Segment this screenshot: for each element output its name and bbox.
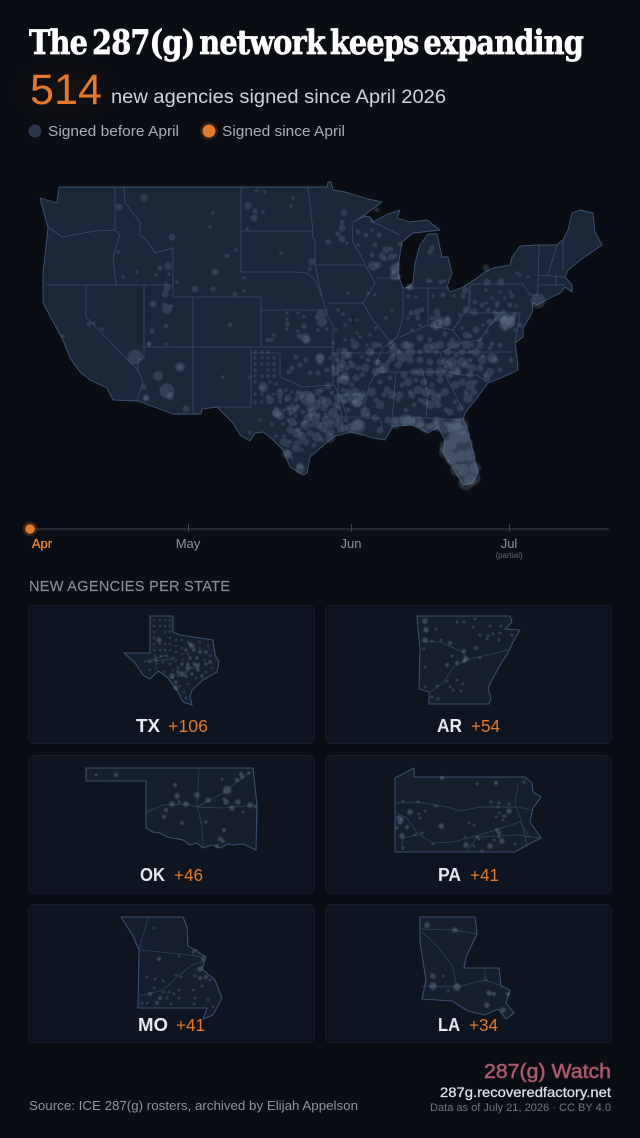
credits: 287g.recoveredfactory.net (440, 1084, 611, 1100)
label: +46 (174, 865, 203, 885)
label: +54 (471, 716, 500, 736)
timeline: Jun (341, 536, 361, 551)
panel: TX (28, 606, 314, 744)
panel: AR (326, 606, 612, 744)
headline stat: 514 (30, 66, 102, 114)
label (437, 716, 500, 736)
label: OK (140, 865, 165, 885)
label: AR (437, 716, 462, 736)
label: +106 (168, 716, 208, 736)
map: United States agencies (40, 182, 602, 485)
legend (28, 122, 345, 140)
label (438, 1015, 498, 1035)
timeline: May (176, 536, 201, 551)
panel: PA (326, 756, 612, 894)
label: MO (138, 1015, 168, 1035)
credits: 287(g) Watch (484, 1061, 611, 1083)
timeline: Apr (32, 536, 53, 551)
label (438, 865, 499, 885)
timeline (22, 522, 609, 560)
timeline: Jul (501, 536, 517, 551)
panel: LA (326, 904, 612, 1042)
label (136, 716, 208, 736)
headline stat: new agencies signed since April 2026 (111, 87, 446, 108)
agency dots (63, 191, 538, 483)
legend: Signed before April (48, 124, 179, 140)
panel: OK (28, 756, 314, 894)
credits: Data as of July 21, 2026 · CC BY 4.0 (430, 1102, 611, 1114)
section heading: NEW AGENCIES PER STATE (29, 579, 230, 595)
label (140, 865, 203, 885)
label (138, 1015, 205, 1035)
label: LA (438, 1015, 460, 1035)
source note: Source: ICE 287(g) rosters, archived by Elijah Appelson (29, 1098, 358, 1113)
label: +41 (176, 1015, 205, 1035)
state borders (46, 187, 565, 432)
land outline (40, 182, 602, 485)
credits (430, 1061, 611, 1114)
headline stat (8, 56, 446, 124)
timeline: (partial) (495, 551, 523, 560)
panel: MO (28, 904, 314, 1042)
label: +34 (469, 1015, 498, 1035)
label: PA (438, 865, 461, 885)
label: +41 (470, 865, 499, 885)
label: TX (136, 716, 160, 736)
legend: Signed since April (222, 124, 345, 140)
